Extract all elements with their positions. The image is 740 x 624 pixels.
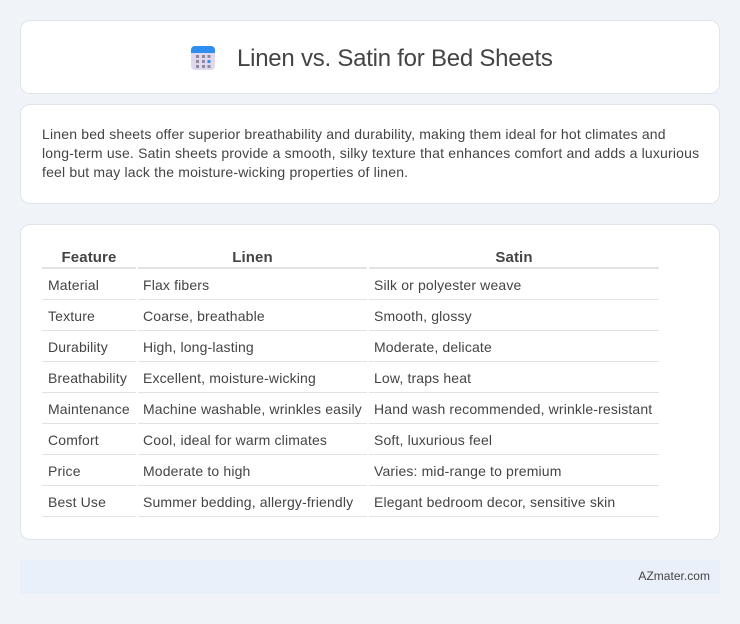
comparison table: Silk or polyester weave (374, 277, 521, 293)
comparison table: Varies: mid-range to premium (374, 463, 562, 479)
comparison table: Best Use (48, 494, 106, 510)
footer bar (20, 560, 720, 594)
panel: introduction (20, 104, 720, 204)
comparison table: Maintenance (48, 401, 130, 417)
footer brand: AZmater.com (638, 569, 710, 583)
comparison table: Low, traps heat (374, 370, 471, 386)
icon: calendar (191, 46, 215, 70)
comparison table: Soft, luxurious feel (374, 432, 492, 448)
comparison table: Smooth, glossy (374, 308, 472, 324)
panel: comparison table card (20, 224, 720, 540)
comparison table: Breathability (48, 370, 127, 386)
comparison table: Price (48, 463, 81, 479)
comparison table: Feature (62, 249, 116, 266)
comparison table (42, 249, 659, 517)
comparison table: Satin (495, 249, 533, 266)
comparison table: Flax fibers (143, 277, 209, 293)
comparison table: Hand wash recommended, wrinkle-resistant (374, 401, 652, 417)
comparison table: Elegant bedroom decor, sensitive skin (374, 494, 615, 510)
comparison table: Material (48, 277, 99, 293)
intro text (42, 126, 699, 180)
comparison table: Moderate to high (143, 463, 250, 479)
comparison table: High, long-lasting (143, 339, 254, 355)
comparison table: Coarse, breathable (143, 308, 265, 324)
comparison table: Durability (48, 339, 108, 355)
panel: title card (20, 20, 720, 94)
comparison table: Texture (48, 308, 95, 324)
comparison table: Cool, ideal for warm climates (143, 432, 327, 448)
comparison table: Moderate, delicate (374, 339, 492, 355)
intro text: long-term use. Satin sheets provide a smooth, silky texture that enhances comfort and adds a luxurious (42, 145, 699, 161)
intro text: Linen bed sheets offer superior breathability and durability, making them ideal for hot climates and (42, 126, 666, 142)
comparison table: Excellent, moisture-wicking (143, 370, 316, 386)
comparison table: Comfort (48, 432, 99, 448)
comparison table: Linen (232, 249, 273, 266)
comparison table: Machine washable, wrinkles easily (143, 401, 362, 417)
title: Linen vs. Satin for Bed Sheets (237, 45, 553, 72)
intro text: feel but may lack the moisture-wicking properties of linen. (42, 164, 408, 180)
comparison table: Summer bedding, allergy-friendly (143, 494, 353, 510)
